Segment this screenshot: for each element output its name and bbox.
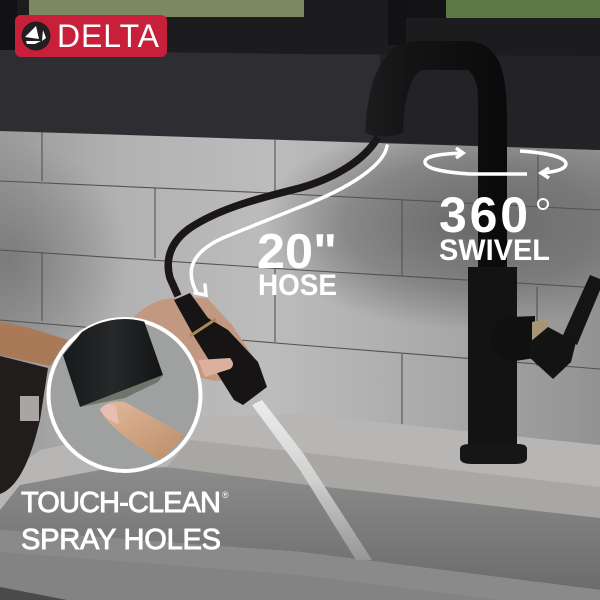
zoomed spray head bbox=[63, 310, 163, 407]
dark upper wall bbox=[0, 0, 600, 150]
tag bbox=[20, 396, 39, 421]
pull-down hose bbox=[168, 137, 378, 296]
callout: spray holes magnifier bbox=[48, 310, 200, 471]
brass ring bbox=[190, 319, 216, 336]
label: Touch-Clean spray holes: SPRAY HOLES bbox=[21, 524, 221, 556]
label: Touch-Clean spray holes: ® bbox=[222, 490, 229, 500]
logo wordmark: DELTA bbox=[57, 18, 160, 54]
hand holding spray head bbox=[0, 293, 267, 405]
label: 20 inch hose bbox=[257, 225, 337, 302]
swivel rotation arrows bbox=[425, 148, 566, 178]
tile grout lines bbox=[0, 132, 600, 424]
window frame band bbox=[0, 0, 600, 56]
fingertip bbox=[198, 358, 233, 377]
logo emblem bbox=[22, 22, 50, 50]
label: 20 inch hose: HOSE bbox=[258, 269, 337, 302]
water stream bbox=[252, 400, 372, 560]
faucet body bbox=[468, 267, 517, 447]
fingertip bbox=[100, 402, 185, 460]
spout bbox=[365, 41, 507, 268]
spray head bbox=[174, 293, 267, 405]
countertop and sink bbox=[0, 400, 600, 600]
handle hub bbox=[490, 316, 535, 361]
label: 360 degree swivel bbox=[439, 187, 550, 267]
handle bbox=[529, 327, 576, 379]
window view left bbox=[29, 0, 304, 17]
bowl with tag bbox=[0, 356, 48, 494]
hose length arrow bbox=[191, 146, 387, 295]
label: 20 inch hose: 20" bbox=[257, 225, 337, 279]
faucet bbox=[365, 41, 600, 464]
window view right bbox=[446, 0, 600, 18]
label: 360 degree swivel: SWIVEL bbox=[439, 234, 550, 267]
label: 360 degree swivel: 360 bbox=[439, 187, 528, 243]
Delta logo badge bbox=[15, 15, 167, 57]
forearm bbox=[0, 322, 68, 366]
brass ring bbox=[532, 319, 550, 345]
label: Touch-Clean spray holes: TOUCH-CLEAN bbox=[21, 487, 221, 519]
frame mullion bbox=[388, 0, 406, 45]
label: Touch-Clean spray holes bbox=[21, 487, 229, 556]
base bbox=[460, 444, 527, 464]
